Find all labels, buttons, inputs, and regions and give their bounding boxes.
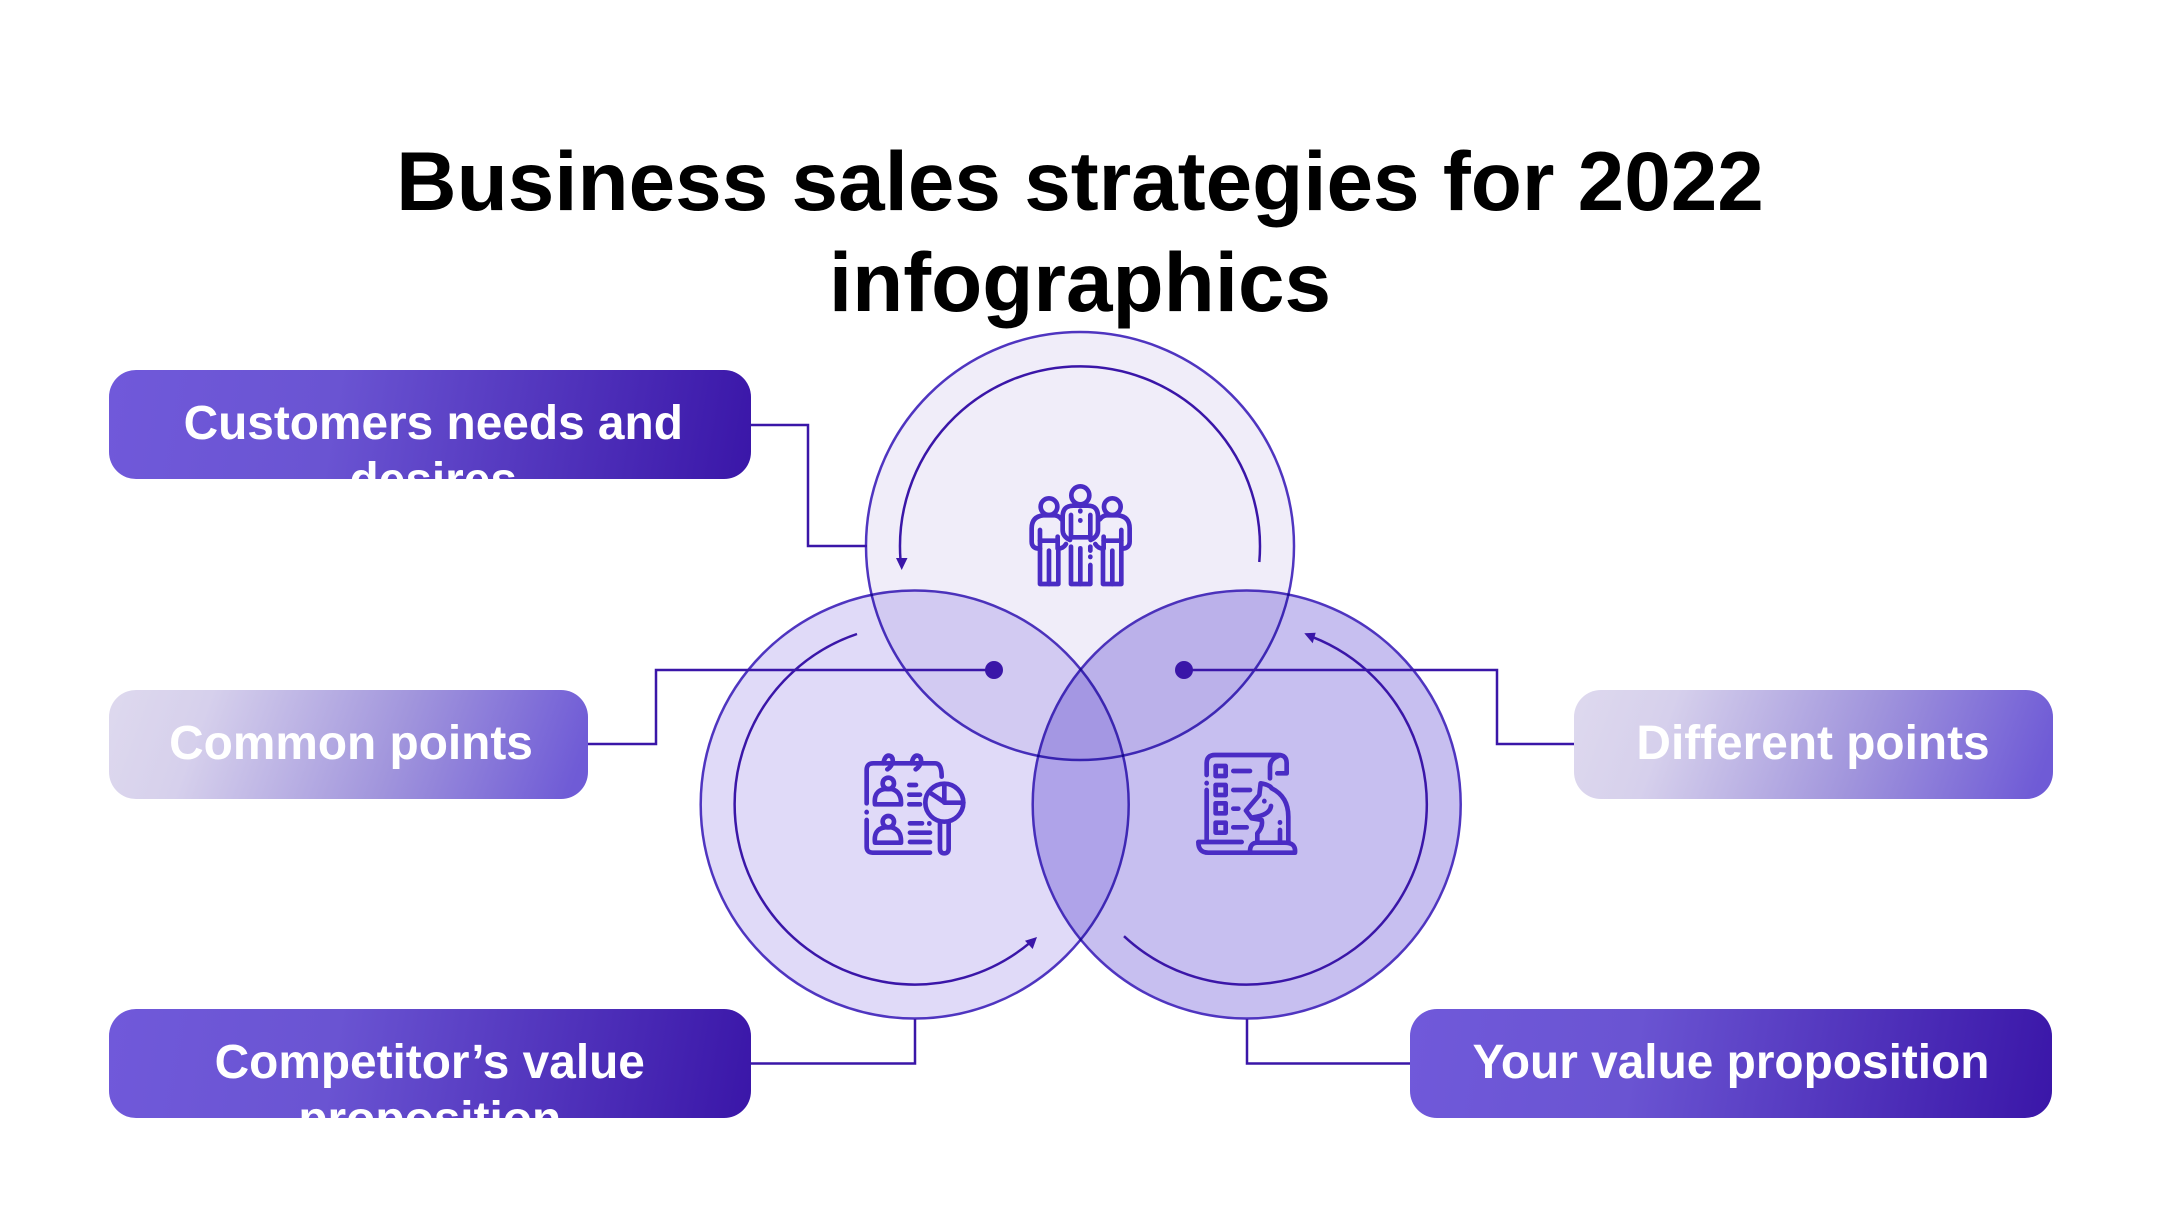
label: different points — [1574, 690, 2052, 799]
arrow: top circle arc — [896, 366, 1260, 570]
label: common points: Common points — [169, 716, 533, 770]
label: customers needs and desires: Customers needs and — [184, 396, 683, 450]
icon: people group — [1032, 486, 1130, 584]
label: customers needs and desires — [108, 370, 751, 479]
label: different points: Different points — [1636, 716, 1990, 770]
label: your value proposition — [1410, 1009, 2052, 1118]
circle: top — [866, 332, 1294, 760]
circle: right — [1033, 590, 1461, 1018]
connector: common points — [587, 661, 1003, 744]
connector: competitor value — [751, 1019, 915, 1064]
title — [396, 134, 1764, 329]
connector: different points — [1175, 661, 1574, 744]
title: Business sales strategies for 2022 — [396, 134, 1764, 228]
label: your value proposition: Your value proposition — [1473, 1036, 1989, 1088]
icon: strategy list with chess knight — [1198, 755, 1295, 853]
arrow: left circle arc — [735, 634, 1037, 985]
label: competitor's value proposition: Competitor’s value — [215, 1036, 645, 1088]
arrow: right circle arc — [1124, 633, 1427, 985]
connector: your value — [1247, 1019, 1410, 1064]
icon: report with magnifier — [867, 756, 963, 853]
label: common points — [108, 690, 588, 799]
label: competitor's value proposition — [108, 1009, 751, 1118]
circle: left — [701, 590, 1129, 1018]
connector: customers needs — [751, 425, 867, 546]
title: infographics — [829, 235, 1331, 329]
